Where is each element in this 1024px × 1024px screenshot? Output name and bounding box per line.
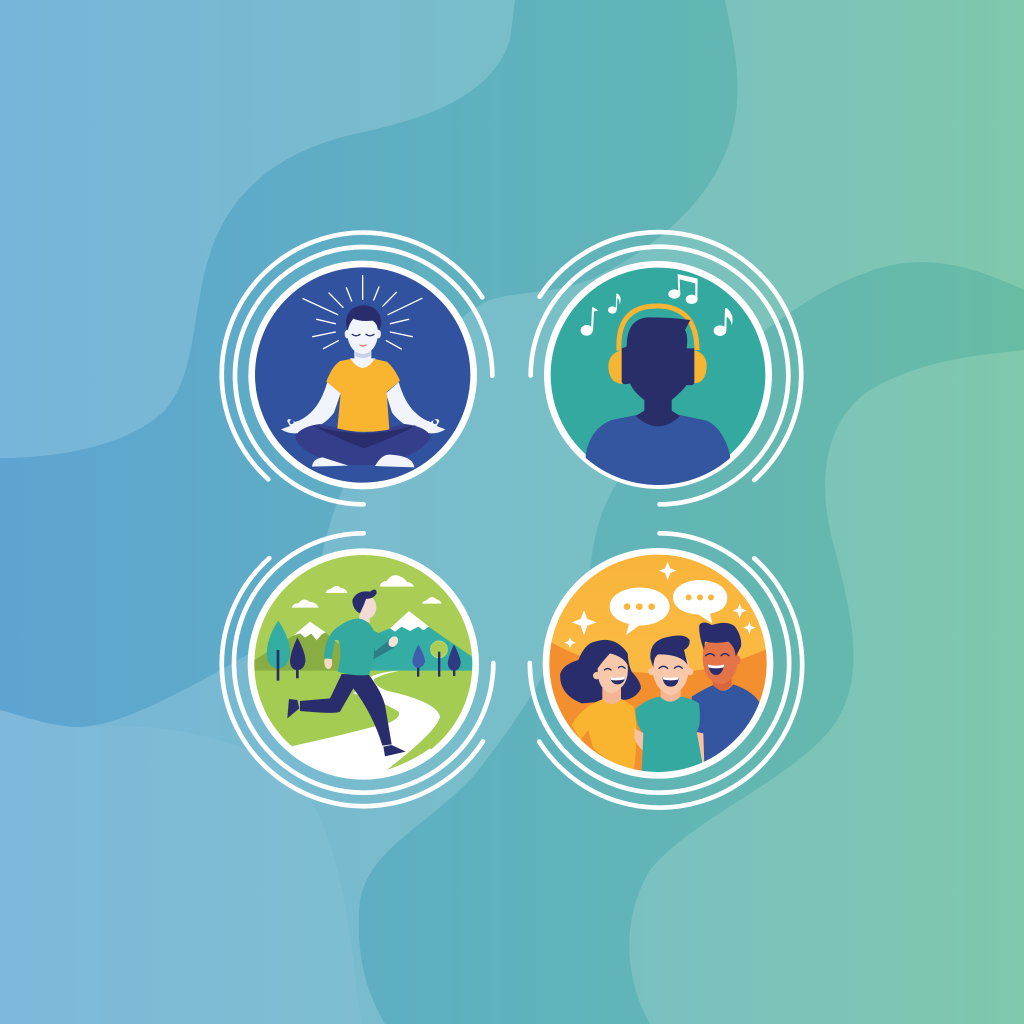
woman in yellow: [560, 640, 641, 770]
music disc: [546, 263, 770, 487]
landscape: [254, 575, 472, 773]
meditating person: [281, 305, 445, 467]
winding path: [292, 670, 440, 773]
speech bubbles: [610, 580, 727, 635]
meditation disc: [251, 263, 474, 487]
social rings: [530, 533, 802, 808]
trees: [267, 621, 461, 681]
sparkles: [564, 562, 756, 648]
music rings: [531, 232, 801, 504]
panel: meditation: [222, 233, 492, 504]
panel: music: [531, 232, 801, 504]
panel: friends talking: [530, 533, 802, 808]
radiating rays: [303, 276, 422, 349]
panel: outdoor running: [222, 533, 493, 806]
social disc: [546, 552, 770, 775]
man in teal: [634, 635, 704, 773]
running disc: [252, 552, 475, 776]
meditation rings: [222, 233, 492, 504]
person with headphones: [586, 306, 730, 490]
social scene: [549, 562, 767, 772]
clouds: [292, 575, 442, 608]
running rings: [222, 533, 493, 806]
man in blue: [692, 622, 760, 762]
runner: [287, 590, 406, 756]
musical notes: [581, 274, 733, 336]
